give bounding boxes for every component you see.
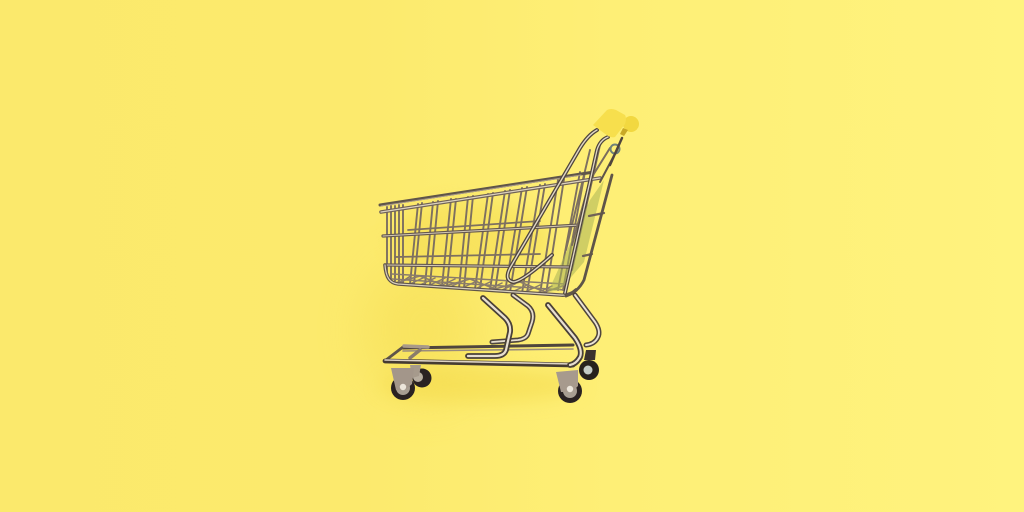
middle rails	[383, 213, 604, 267]
wheel: rear right	[579, 350, 599, 380]
back legs	[492, 295, 599, 345]
undercarriage frame	[385, 345, 573, 365]
back wall frame	[566, 148, 617, 296]
basket vertical wires	[387, 145, 600, 294]
yellow handle	[593, 109, 639, 137]
front legs	[468, 298, 581, 365]
wheel: front right	[556, 370, 582, 403]
cart shadow	[365, 200, 580, 403]
top rail	[380, 172, 600, 212]
wheel: front left	[391, 368, 415, 400]
handle arm loops	[508, 130, 608, 293]
basket bottom edge	[385, 265, 576, 295]
handle clip	[610, 138, 622, 165]
green mesh panel	[548, 180, 604, 292]
shopping cart	[380, 109, 639, 365]
basket floor grid	[392, 274, 565, 293]
wheel: rear left	[410, 365, 432, 388]
